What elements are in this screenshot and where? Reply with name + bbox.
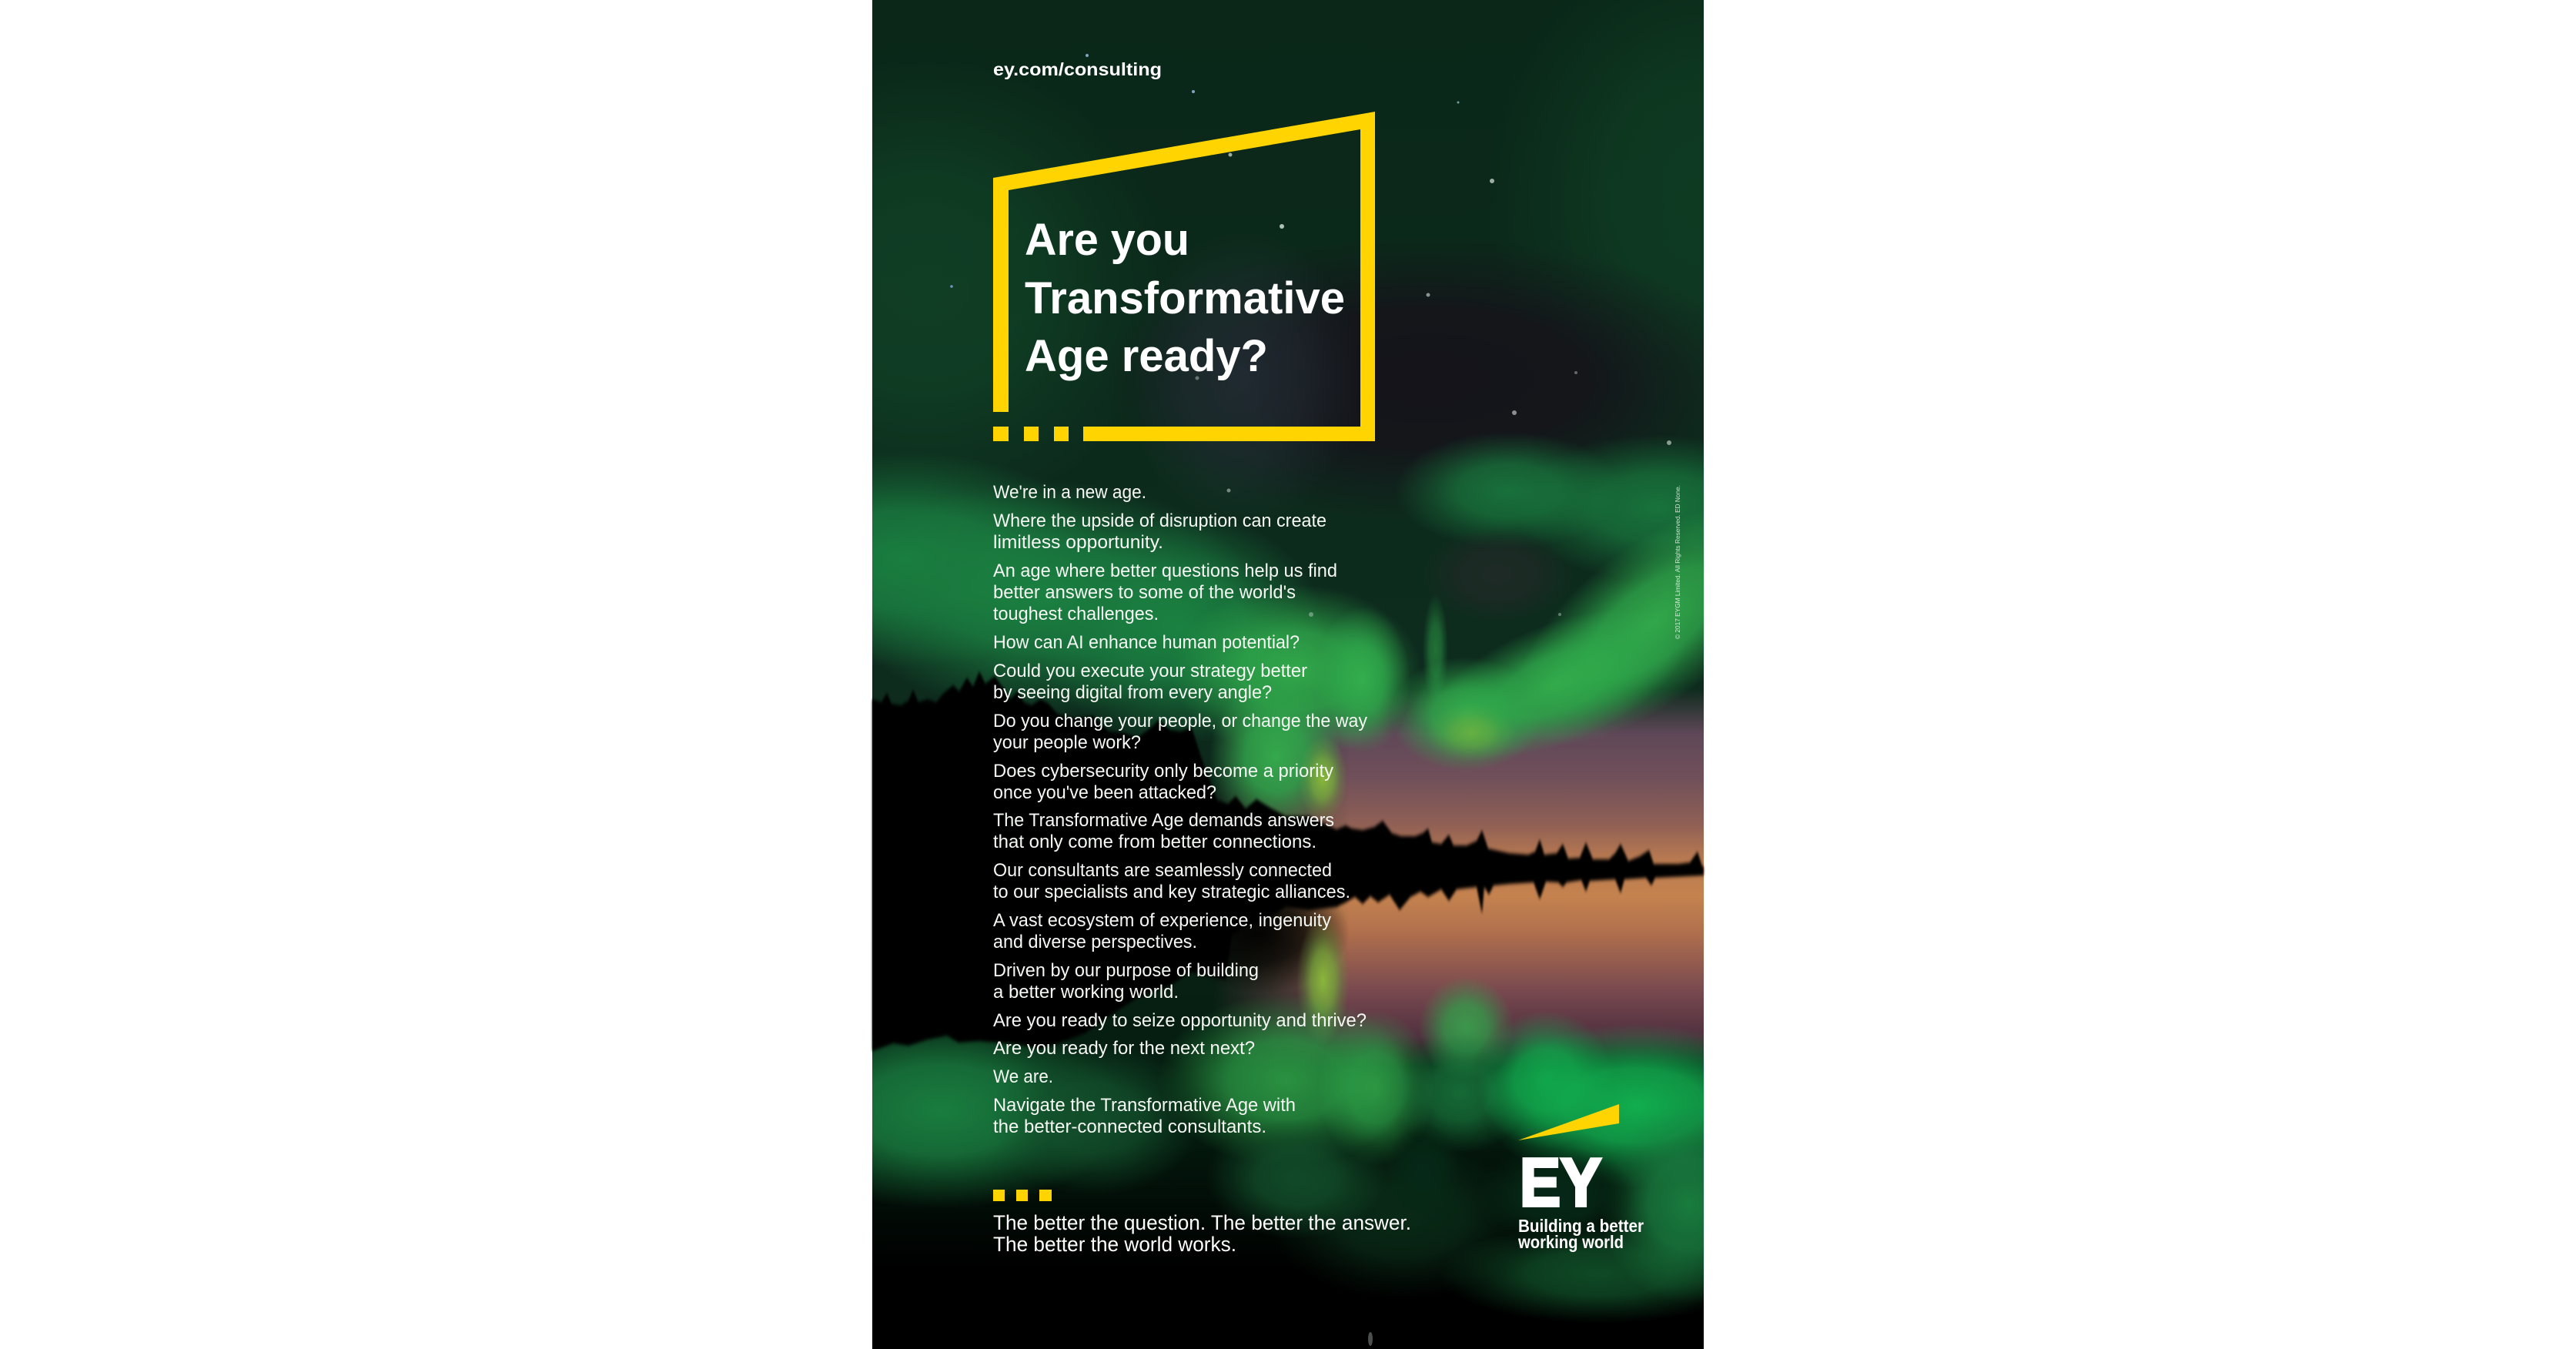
body copy: by seeing digital from every angle? xyxy=(993,682,1272,703)
left aurora glow xyxy=(698,452,1323,745)
body copy: that only come from better connections. xyxy=(993,832,1316,852)
stars xyxy=(950,54,1671,1346)
body copy: Our consultants are seamlessly connected xyxy=(993,860,1332,881)
body copy: Where the upside of disruption can create xyxy=(993,510,1326,531)
heading: Age ready? xyxy=(1025,331,1268,381)
copyright line: © 2017 EYGM Limited. All Rights Reserved. ED None. xyxy=(1674,485,1681,639)
right aurora arch xyxy=(1390,432,1812,795)
body copy: Are you ready for the next next? xyxy=(993,1038,1255,1059)
body copy: An age where better questions help us find xyxy=(993,561,1337,581)
tree line silhouette xyxy=(872,671,1704,1051)
body copy: better answers to some of the world's xyxy=(993,582,1296,603)
url line: ey.com/consulting xyxy=(993,59,1162,79)
tagline: The better the world works. xyxy=(993,1233,1236,1256)
central aurora curtains xyxy=(1172,585,1448,835)
logo beam xyxy=(1518,1104,1619,1140)
dark water near the shore xyxy=(1169,873,1350,994)
heading: Transformative xyxy=(1025,273,1345,323)
sunset sky and lake glow xyxy=(1212,688,1704,1067)
body copy: Does cybersecurity only become a priority xyxy=(993,761,1333,782)
body copy: once you've been attacked? xyxy=(993,782,1216,803)
body copy: toughest challenges. xyxy=(993,604,1159,624)
body copy: How can AI enhance human potential? xyxy=(993,632,1300,653)
body copy: We're in a new age. xyxy=(993,482,1146,503)
logo strapline: Building a better xyxy=(1518,1216,1644,1236)
logo strapline: working world xyxy=(1517,1232,1624,1252)
body copy: Could you execute your strategy better xyxy=(993,661,1307,681)
tagline: The better the question. The better the answer. xyxy=(993,1211,1411,1234)
body copy: Are you ready to seize opportunity and thrive? xyxy=(993,1010,1367,1031)
photo background: aurora over a lake xyxy=(872,0,1704,1349)
body copy: The Transformative Age demands answers xyxy=(993,810,1334,831)
body copy: the better-connected consultants. xyxy=(993,1116,1266,1137)
upper sky glows xyxy=(681,0,1933,525)
body copy: Do you change your people, or change the way xyxy=(993,711,1367,731)
tagline xyxy=(993,1211,1411,1256)
body copy: your people work? xyxy=(993,732,1141,753)
body copy xyxy=(993,482,1367,1137)
body copy: Driven by our purpose of building xyxy=(993,960,1259,981)
body copy: to our specialists and key strategic alliances. xyxy=(993,882,1350,902)
logo wordmark: EY xyxy=(1520,1144,1601,1220)
body copy: A vast ecosystem of experience, ingenuity xyxy=(993,910,1331,931)
three yellow squares xyxy=(993,1190,1052,1201)
body copy: We are. xyxy=(993,1066,1053,1087)
heading xyxy=(1025,215,1345,381)
body copy: and diverse perspectives. xyxy=(993,932,1197,952)
body copy: limitless opportunity. xyxy=(993,532,1163,553)
heading: Are you xyxy=(1025,215,1189,265)
lake: aurora reflection xyxy=(755,916,1790,1323)
yellow heading frame xyxy=(993,112,1375,441)
logo strapline xyxy=(1517,1216,1644,1252)
EY logo xyxy=(1517,1104,1644,1252)
body copy: Navigate the Transformative Age with xyxy=(993,1095,1296,1116)
body copy: a better working world. xyxy=(993,982,1179,1003)
